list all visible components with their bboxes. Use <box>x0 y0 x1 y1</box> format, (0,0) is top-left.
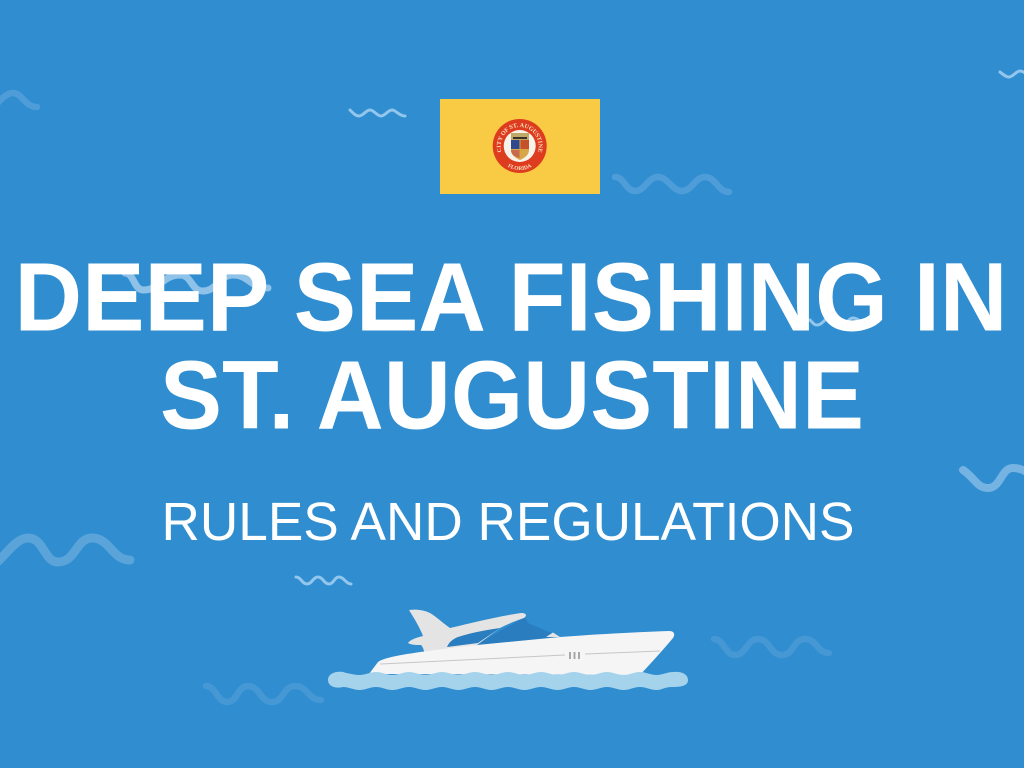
flag of St. Augustine <box>440 99 600 194</box>
boat radar arch <box>408 610 526 656</box>
boat hull <box>369 631 674 675</box>
title: ST. AUGUSTINE <box>160 340 864 450</box>
boat stripe and vents <box>380 651 660 664</box>
flag seal: FLORIDA <box>508 164 532 170</box>
boat cabin glass <box>470 617 556 648</box>
title <box>14 242 1008 450</box>
flag seal <box>492 119 547 173</box>
boat side window <box>447 628 500 647</box>
title: DEEP SEA FISHING IN <box>14 242 1008 352</box>
boat <box>328 610 688 690</box>
subtitle: RULES AND REGULATIONS <box>162 492 854 552</box>
water under boat <box>328 672 688 690</box>
boat foredeck <box>546 632 560 637</box>
flag seal: CITY OF ST. AUGUSTINE <box>496 123 543 152</box>
